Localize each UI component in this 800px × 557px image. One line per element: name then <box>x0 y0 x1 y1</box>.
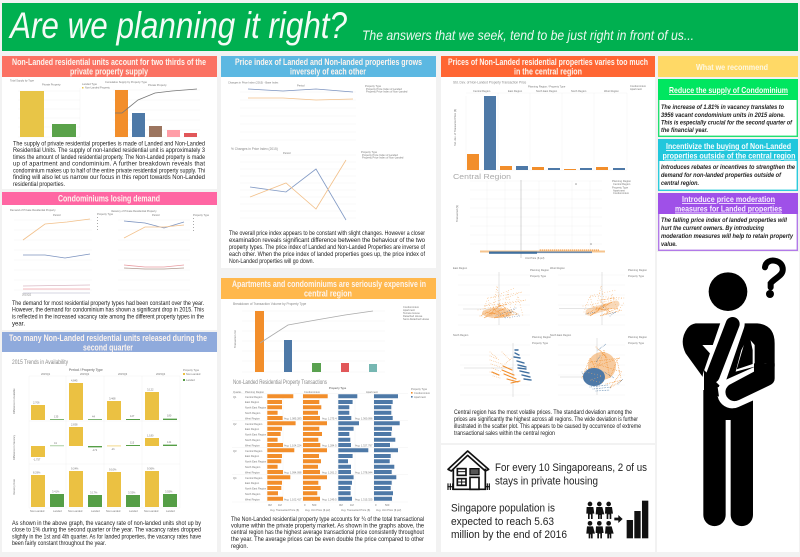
heading: apartments and condominiums: central region <box>304 288 352 298</box>
title banner: The answers that we seek, tend to be just right in front of us... <box>362 27 694 43</box>
bar table: transactions by region: North East Region <box>245 460 267 464</box>
bar table: transactions by region: 0M <box>268 503 272 507</box>
line chart: overall price index: Property Price Index of Non-Landed <box>366 90 408 94</box>
pareto chart: transaction volume: Breakdown of Transaction Volume by Property Type <box>233 302 307 306</box>
bar table: transactions by region: Property Type <box>329 386 347 390</box>
bar table: transactions by region: 0 <box>375 503 377 507</box>
text block: transactions: volume within the private property market. As shown in the graphs above, the <box>231 524 425 530</box>
recommendation: price moderation: moderation measures will help to retain property <box>661 234 794 240</box>
bar chart: trends in availability: 8.29% <box>33 470 41 474</box>
line chart: overall price index: Property Type <box>365 84 382 88</box>
bar chart: trends in availability: 2015Q3 <box>118 372 128 376</box>
text block: availability: close to 1% during the second quarter or the year. The vacancy rates dropped <box>12 528 201 534</box>
text block: transactions <box>231 517 425 550</box>
text block: availability <box>12 521 202 547</box>
scatter plot: north east region <box>550 333 648 395</box>
bar table: transactions by region: Property Type <box>411 387 428 391</box>
recommendation: reduce supply: The increase of 1.81% in vacancy translates to <box>661 105 784 111</box>
panel: thinking figure <box>657 252 799 552</box>
bar chart: trends in availability: 3.55% <box>165 490 173 494</box>
text: population forecast: million by the end of 2016 <box>451 529 567 541</box>
text block: availability: been fairly constant throughout the year. <box>12 541 106 547</box>
bar table: transactions by region: Avg. 1,104,224 <box>284 444 302 448</box>
text: population forecast: Singapore population is <box>451 502 555 514</box>
bar table: transactions by region: Avg. 1,094,098 <box>284 470 302 474</box>
bar chart: trends in availability: 3.41% <box>52 490 60 494</box>
text block: supply: residential properties. <box>13 182 65 188</box>
line chart: demand: Property Type <box>97 212 114 216</box>
bar table: transactions by region: Condominium <box>414 391 430 395</box>
recommendation: reduce supply: This is especially crucial for the second quarter of <box>661 120 793 126</box>
text block: supply: finding will also let us narrow our focus in this report towards Non-Landed <box>13 175 205 181</box>
heading: prices vary: Prices of Non-Landed residential properties varies too much <box>448 57 648 67</box>
scatter plot: north region: North Region <box>453 333 469 337</box>
text block: price index: each other. When the price index of landed properties goes up, the price index of <box>229 252 425 258</box>
pareto chart: transaction volume: Condominium <box>403 305 419 309</box>
line chart: percent changes in price index <box>231 147 404 220</box>
bar chart: standard deviation: North East Region <box>536 89 558 93</box>
bar table: transactions by region: East Region <box>245 481 260 485</box>
title banner: Are we planning it right? <box>8 5 347 46</box>
text block: demand: year. <box>12 321 25 327</box>
scatter plot: east region: Property Type <box>530 274 547 278</box>
heading: non-landed two thirds: Non-Landed residential units account for two thirds of the <box>12 57 206 67</box>
pareto chart: supply by property type: Cumulative Supply by Property Type <box>105 80 147 84</box>
recommendation: incentivize: demand for non-landed properties outside of <box>661 173 782 179</box>
bar table: transactions by region: Avg. 1,085,283 <box>284 416 302 420</box>
bar table: transactions by region: Avg. 1,275.4 <box>322 416 337 420</box>
icon: house <box>447 451 490 490</box>
bar chart: trends in availability: 2,706 <box>33 400 40 404</box>
bar chart: trends in availability: Landed <box>166 509 175 513</box>
scatter plot: north region: Planning Region <box>532 335 552 339</box>
bar chart: standard deviation: Std. Dev. of Non-Landed Property Transaction Price <box>453 80 527 84</box>
scatter plot: central region: Central Region <box>613 182 631 186</box>
text block: demand: is reflected in the increased vacancy rate among the different property types in the <box>12 314 205 320</box>
bar chart: trends in availability: 180 <box>167 414 172 418</box>
bar chart: trends in availability: 3.33% <box>128 490 136 494</box>
text block: demand <box>12 301 205 327</box>
bar table: transactions by region: North Region <box>245 465 261 469</box>
text block: volatility <box>454 410 642 437</box>
scatter plot: north east region: Planning Region <box>628 335 648 339</box>
bar chart: standard deviation: Central Region <box>473 89 491 93</box>
bar chart: trends in availability: 4,845 <box>71 378 78 382</box>
heading: too many units <box>9 333 207 352</box>
heading: price index: Price index of Landed and Non-landed properties grows <box>235 57 422 67</box>
line chart: vacancy: Period <box>152 213 160 217</box>
bar chart: trends in availability: -172 <box>92 448 98 452</box>
scatter plot: west region: West Region <box>550 266 565 270</box>
heading: prices vary: in the central region <box>514 66 582 76</box>
bar chart: trends in availability: Non-Landed <box>30 509 45 513</box>
bar table: transactions by region: 0M <box>339 503 343 507</box>
text block: supply: times the amount of landed residential property. The Non-Landed property is made <box>13 155 206 161</box>
bar table: transactions by region: East Region <box>245 427 260 431</box>
pareto chart: transaction volume: Terrace House <box>403 311 420 315</box>
recommendation: price moderation: Introduce price moderation <box>682 195 775 204</box>
bar table: transactions by region: Quarte.. <box>233 390 243 394</box>
scatter plot: central region: Apartment <box>613 188 625 192</box>
heading: non-landed two thirds: private property supply <box>70 66 148 76</box>
line chart: percent changes in price index: % Changes in Price Index (2015) <box>231 147 278 151</box>
bar chart: standard deviation: Std. dev. of Transacted Price ($) <box>453 109 457 146</box>
text block: price index: property types. The price index of Landed and Non-Landed Properties are inverse of <box>229 245 425 251</box>
bar chart: trends in availability: Non-Landed <box>186 372 201 376</box>
panel: price variance <box>441 56 655 443</box>
bar chart: trends in availability: Landed <box>186 378 195 382</box>
panel: expensive in central region <box>221 278 436 552</box>
panel: population facts <box>441 445 655 552</box>
bar chart: trends in availability: 3,468 <box>109 396 116 400</box>
text: private housing: For every 10 Singaporeans, 2 of us <box>495 462 647 474</box>
bar table: transactions by region: Q2 <box>233 422 237 426</box>
bar table: transactions by region: Apartment <box>414 395 426 399</box>
text block: supply: The supply of private residential properties is made of Landed and Non-Landed <box>13 142 205 148</box>
scatter plot: north region: Property Type <box>532 341 549 345</box>
line chart: demand: Demand of Private Residential Property <box>10 208 56 212</box>
scatter plot: central region: Condominium <box>613 191 629 195</box>
bar table: transactions by region: North Region <box>245 492 261 496</box>
bar table: transactions by region: Central Region <box>245 422 263 426</box>
heading: prices vary <box>448 57 648 76</box>
bar chart: trends in availability: 141 <box>167 440 172 444</box>
line chart: demand <box>10 208 114 296</box>
bar table: transactions by region: West Region <box>245 498 260 502</box>
scatter plot: north east region: Property Type <box>628 341 645 345</box>
bar table: transactions by region: Avg. 1,360,096 <box>355 416 373 420</box>
scatter plot: east region: East Region <box>453 266 468 270</box>
bar chart: trends in availability: 2015Q1 <box>41 372 51 376</box>
panel: supply of private property <box>2 56 217 189</box>
panel: condominiums losing demand <box>2 192 217 330</box>
line chart: demand: Period <box>53 213 61 217</box>
text block: price index: Non-Landed properties will go down. <box>229 259 314 265</box>
bar table: transactions by region <box>232 386 430 512</box>
text: population forecast <box>451 502 567 541</box>
bar table: transactions by region: North Region <box>245 411 261 415</box>
bar chart: standard deviation: Planning Region / Property Type <box>528 84 566 88</box>
bar chart: standard deviation: Apartment <box>630 87 642 91</box>
bar chart: trends in availability: 2,838 <box>71 422 78 426</box>
pareto chart: transaction volume: Semi-Detached House <box>403 317 430 321</box>
bar chart: trends in availability: 9.10% <box>109 468 117 472</box>
scatter plot: central region: Unit Price ($ psf) <box>525 256 544 260</box>
text block: transactions: The Non-Landed residential property type accounts for ¾ of the total transactional <box>231 517 424 523</box>
bar chart: trends in availability: 2015Q2 <box>80 372 90 376</box>
recommendation: price moderation: measures for Landed properties <box>675 204 782 214</box>
text block: transactions: central region has the highest average transactional price consistently throughout <box>231 530 424 536</box>
heading: too many units: Too many Non-Landed residential units released during the <box>9 333 207 343</box>
recommendation: reduce supply <box>658 79 798 136</box>
scatter plot: central region <box>453 172 632 260</box>
bar table: transactions by region: Avg. Unit Price ($ psf) <box>305 508 330 512</box>
bar chart: trends in availability: -1,757 <box>33 458 41 462</box>
bar chart: trends in availability: Difference in Available <box>12 388 16 414</box>
bar chart: standard deviation: North Region <box>571 89 587 93</box>
bar chart: trends in availability: Landed <box>53 509 62 513</box>
text block: supply: up of apartment and condominium. A further breakdown reveals that <box>13 162 205 168</box>
bar chart: standard deviation: East Region <box>508 89 523 93</box>
bar table: transactions by region: Central Region <box>245 449 263 453</box>
bar chart: trends in availability: 9.24% <box>71 466 79 470</box>
line chart: percent changes in price index: Period <box>283 151 291 155</box>
bar chart: trends in availability: Period / Property Type <box>69 368 103 372</box>
bar table: transactions by region: North East Region <box>245 432 267 436</box>
bar chart: standard deviation <box>453 80 646 170</box>
bar table: transactions by region: 500 <box>385 503 390 507</box>
bar chart: trends in availability: Landed <box>91 509 100 513</box>
bar table: transactions by region: Avg. 1,315,325 <box>355 498 373 502</box>
bar chart: supply by landed type <box>10 78 111 137</box>
heading: condominiums: Condominiums losing demand <box>58 194 160 204</box>
bar table: transactions by region: West Region <box>245 470 260 474</box>
bar table: transactions by region: Apartment <box>366 390 378 394</box>
bar chart: trends in availability: 41 <box>54 441 57 445</box>
line chart: percent changes in price index: Property Price Index of Landed <box>362 153 398 157</box>
heading: too many units: second quarter <box>83 342 133 352</box>
text block: supply: Residential Units. The supply of non-landed residential unit is approximately 3 <box>13 148 206 154</box>
bar chart: trends in availability: Vacancy Rate <box>12 478 16 495</box>
pareto chart: supply by property type <box>105 80 200 137</box>
text block: volatility: illustrated in the scatter plot. This appears to be caused by occurrence of extreme <box>454 424 642 430</box>
text block: price index: examination reveals significant difference between the behaviour of the two <box>229 238 426 244</box>
scatter plot: west region: Property Type <box>628 274 645 278</box>
bar table: transactions by region: North East Region <box>245 406 267 410</box>
line chart: percent changes in price index: Property Type <box>361 150 378 154</box>
scatter plot: central region: Central Region <box>453 172 511 181</box>
bar table: transactions by region: Q1 <box>233 395 237 399</box>
bar table: transactions by region: Avg. 1,284.5 <box>322 444 337 448</box>
text block: supply <box>13 142 206 188</box>
bar chart: standard deviation: West Region <box>604 89 619 93</box>
text block: transactions: region. <box>231 544 248 550</box>
text block: volatility: prices are significantly the highest across all regions. The wide deviation is further <box>454 417 638 423</box>
bar chart: trends in availability: Landed <box>129 509 138 513</box>
bar chart: trends in availability: 44 <box>92 414 95 418</box>
text block: price index <box>229 231 426 265</box>
scatter plot: west region: Planning Region <box>628 268 648 272</box>
line chart: vacancy: Vacancy of Private Residential Property <box>111 209 157 213</box>
text block: price index: The overall price index appears to be constant with slight changes. However a closer <box>229 231 425 237</box>
bar chart: trends in availability: Difference in Vacancy <box>12 434 16 460</box>
chart title: 2015 Trends in Availability <box>12 360 68 366</box>
bar chart: trends in availability: 3,122 <box>147 388 154 392</box>
text: private housing <box>495 462 647 488</box>
panel: recommendations heading <box>658 56 798 77</box>
line chart: overall price index <box>228 80 408 140</box>
scatter plot: east region <box>453 266 550 325</box>
bar table: transactions by region: Central Region <box>245 476 263 480</box>
text block: transactions: the year. The average prices can be even double the price compared to other <box>231 537 424 543</box>
text block: volatility: Central region has the most volatile prices. The standard deviation among the <box>454 410 633 416</box>
bar table: transactions by region: Q3 <box>233 449 237 453</box>
recommendation: reduce supply: 3956 vacant condominium units in 2015 alone. <box>661 113 785 119</box>
scatter plot: central region: Transacted ($) <box>455 205 459 222</box>
pareto chart: transaction volume <box>233 302 430 372</box>
panel: recommendations heading: What we recommend <box>696 62 768 72</box>
bar chart: standard deviation: Condominium <box>630 84 646 88</box>
chart title: Non-Landed Residential Property Transactions <box>233 380 327 386</box>
recommendation: incentivize <box>658 139 798 190</box>
bar chart: trends in availability: 9.36% <box>147 466 155 470</box>
bar table: transactions by region: 1M <box>278 503 282 507</box>
bar chart: trends in availability: 115 <box>130 440 135 444</box>
heading: price index <box>235 57 422 76</box>
pareto chart: supply by property type: Private Property <box>148 83 167 87</box>
bar chart: trends in availability <box>12 368 201 513</box>
pareto chart: transaction volume: Apartment <box>403 308 415 312</box>
line chart: vacancy: Property Type <box>193 213 210 217</box>
bar chart: trends in availability: Non-Landed <box>144 509 159 513</box>
bar chart: supply by landed type: Total Supply by Type <box>10 78 34 82</box>
bar table: transactions by region: East Region <box>245 400 260 404</box>
pareto chart: transaction volume: Detached House <box>403 314 423 318</box>
bar table: transactions by region: 1M <box>350 503 354 507</box>
text block: volatility: transactional sales within the central region <box>454 431 555 437</box>
line chart: percent changes in price index: Property Price Index of Non-Landed <box>362 156 404 160</box>
bar table: transactions by region: Q4 <box>233 476 237 480</box>
bar table: transactions by region: Avg. 1,378,044 <box>355 470 373 474</box>
bar table: transactions by region: Avg. 1,261.2 <box>322 470 337 474</box>
bar table: transactions by region: Avg. Transacted Price ($) <box>270 508 299 512</box>
text block: availability: As shown in the above graph, the vacancy rate of non-landed units shot up by <box>12 521 201 527</box>
bar chart: trends in availability: 135 <box>54 414 59 418</box>
bar table: transactions by region: North Region <box>245 438 261 442</box>
panel: price index <box>221 56 436 268</box>
heading: apartments and condominiums <box>232 279 426 298</box>
bar table: transactions by region: East Region <box>245 454 260 458</box>
heading: apartments and condominiums: Apartments and condominiums are seriously expensive in <box>232 279 426 289</box>
scatter plot: east region: Planning Region <box>530 268 550 272</box>
heading: price index: inversely of each other <box>290 66 366 76</box>
bar table: transactions by region: Avg. 1,102,417 <box>284 498 302 502</box>
bar chart: supply by landed type: Non-Landed Property <box>85 86 111 90</box>
icon: people to growth bars <box>586 501 648 538</box>
bar chart: trends in availability: Non-Landed <box>68 509 83 513</box>
recommendation: price moderation: The falling price index of landed properties will <box>661 218 787 224</box>
line chart: demand: 2015Q1 <box>22 292 32 296</box>
line chart: overall price index: Property Price Index of Landed <box>366 87 402 91</box>
bar table: transactions by region: Avg. 1,249.5 <box>322 498 337 502</box>
recommendation: incentivize: central region. <box>661 181 699 187</box>
bar chart: trends in availability: 127 <box>130 414 135 418</box>
pareto chart: transaction volume: Transaction Vol <box>233 330 237 348</box>
recommendation: reduce supply: the financial year. <box>661 128 708 134</box>
bar chart: trends in availability: Non-Landed <box>106 509 121 513</box>
bar table: transactions by region: Avg. Unit Price ($ psf) <box>376 508 401 512</box>
text block: availability: slightly in the 1st and 4th quarter. As for landed properties, the vacancy rates have <box>12 534 202 540</box>
bar chart: trends in availability: 2015Q4 <box>156 372 166 376</box>
recommendation: price moderation: value. <box>661 242 677 248</box>
text: private housing: stays in private housing <box>495 476 598 488</box>
icon: thinking person with question mark <box>683 261 783 526</box>
text block: supply: condominium makes up to half of the entire private residential property supply. Thi <box>13 168 205 174</box>
title banner <box>2 3 798 51</box>
bar chart: trends in availability: 3.17% <box>90 490 98 494</box>
bar table: transactions by region: West Region <box>245 416 260 420</box>
line chart: overall price index: Changes in Price Index (2015) - Base Index <box>228 80 279 84</box>
line chart: vacancy <box>111 209 210 290</box>
bar chart: trends in availability: Property Type <box>183 368 200 372</box>
bar table: transactions by region: West Region <box>245 444 260 448</box>
panel: non-landed units released <box>2 332 217 552</box>
recommendation: price moderation <box>658 193 798 250</box>
bar table: transactions by region: 0 <box>304 503 306 507</box>
bar chart: supply by landed type: Private Property <box>42 82 61 86</box>
bar table: transactions by region: Condominium <box>304 390 320 394</box>
recommendation: price moderation: hurt the current owners. By introducing <box>661 226 764 232</box>
bar table: transactions by region: North East Region <box>245 486 267 490</box>
bar chart: trends in availability: -21 <box>111 447 115 451</box>
scatter plot: central region: Property Type <box>612 186 629 190</box>
line chart: overall price index: Period <box>297 84 305 88</box>
scatter plot: west region <box>550 266 648 325</box>
bar table: transactions by region: Central Region <box>245 395 263 399</box>
text: population forecast: expected to reach 5.63 <box>451 516 554 528</box>
text block: demand: The demand for most residential property types had been constant over the year. <box>12 301 204 307</box>
bar table: transactions by region: 500 <box>312 503 317 507</box>
bar table: transactions by region: Planning Region <box>245 390 265 394</box>
bar chart: trends in availability: 1,180 <box>147 434 154 438</box>
scatter plot: north region <box>453 333 552 397</box>
scatter plot: north east region: North East Region <box>550 333 572 337</box>
scatter plot: central region: Planning Region <box>612 179 632 183</box>
heading: non-landed two thirds <box>12 57 206 76</box>
bar table: transactions by region: Avg. Transacted Price ($) <box>341 508 370 512</box>
recommendation: incentivize: Introduces rebates or incentives to strengthen the <box>661 165 796 171</box>
bar chart: supply by landed type: Landed Type <box>82 82 98 86</box>
text block: demand: However, the demand for condominium has shown a significant drop in 2015. This <box>12 308 204 314</box>
bar table: transactions by region: Avg. 1,327,797 <box>355 444 373 448</box>
